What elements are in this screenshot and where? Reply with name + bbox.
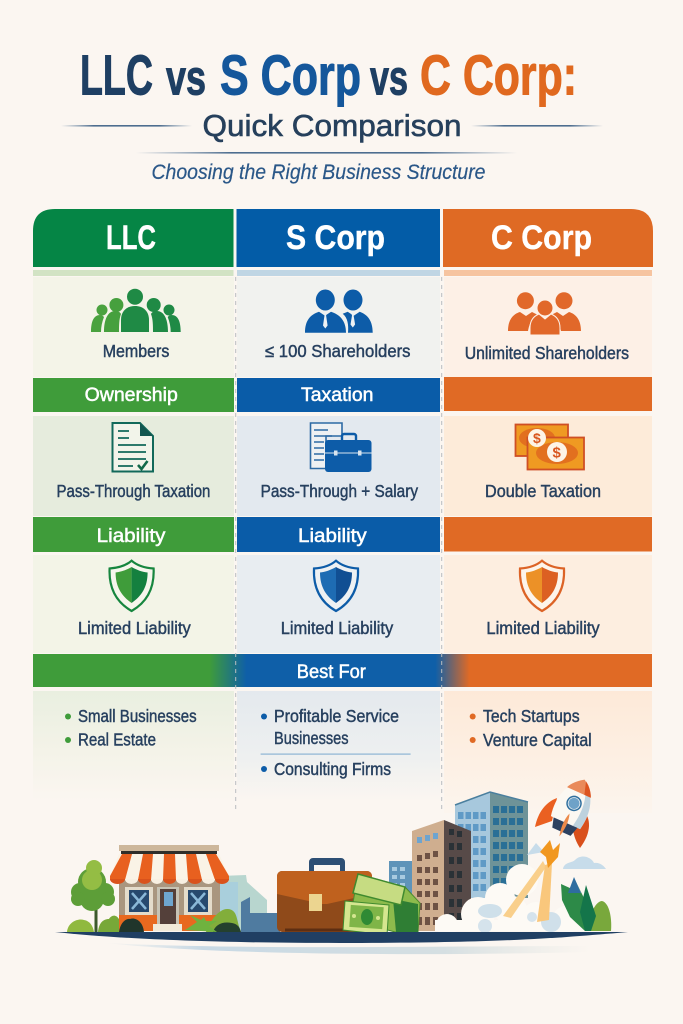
icon: cash stacks	[343, 874, 420, 935]
panel: C Corp header	[443, 209, 653, 276]
list: C Corp uses: Venture Capital	[483, 730, 592, 750]
label: Limited Liability LLC: Limited Liability	[78, 618, 191, 638]
ground shadow	[105, 943, 590, 954]
list: C Corp uses	[470, 706, 592, 750]
label: Pass-Through + Salary: Pass-Through + Salary	[261, 481, 418, 501]
band: Best For	[33, 654, 652, 687]
icon: green shield	[110, 561, 154, 611]
background buildings left	[220, 875, 280, 932]
panel: taxation row	[33, 416, 652, 516]
label: 100 shareholders: ≤ 100 Shareholders	[265, 341, 411, 361]
tagline: Choosing the Right Business Structure	[152, 161, 486, 184]
band: Ownership: Ownership	[85, 384, 178, 406]
band: Liability S Corp	[237, 517, 440, 552]
list: C Corp uses: Tech Startups	[483, 706, 580, 726]
illustration: business scene	[55, 773, 628, 954]
list: S Corp uses: Businesses	[274, 728, 349, 748]
panel: LLC header: LLC	[106, 219, 156, 257]
band: Liability LLC	[33, 517, 234, 552]
band: C Corp blank ownership bar	[444, 377, 652, 411]
panel: C Corp header: C Corp	[491, 219, 592, 257]
band: C Corp blank liability bar	[444, 517, 652, 552]
title: vs	[166, 52, 206, 106]
icon: storefront	[110, 845, 229, 932]
icon: tax document	[112, 423, 153, 472]
panel: S Corp header	[236, 209, 440, 276]
icon: briefcase	[277, 858, 372, 932]
list: LLC uses: Real Estate	[78, 730, 156, 750]
panel: LLC header	[33, 209, 234, 276]
icon: rocket	[503, 773, 600, 922]
label: Limited Liability C Corp: Limited Liability	[486, 618, 600, 638]
label: Limited Liability S Corp: Limited Liability	[281, 618, 393, 638]
icon: members group	[91, 289, 181, 332]
band: Liability S Corp: Liability	[298, 525, 367, 547]
icon: blue shield	[314, 561, 358, 611]
list: LLC uses: Small Businesses	[78, 706, 197, 726]
title: S Corp	[220, 44, 361, 108]
list: S Corp uses: Profitable Service	[274, 706, 399, 726]
title: LLC	[80, 44, 153, 108]
icon: double taxation money: $	[552, 444, 562, 462]
trees right	[561, 877, 611, 931]
label: Double Taxation: Double Taxation	[485, 481, 601, 501]
icon: double taxation money	[516, 424, 584, 470]
list: S Corp uses	[261, 706, 411, 779]
band: Taxation: Taxation	[301, 384, 374, 406]
icon: double taxation money: $	[533, 430, 541, 446]
title: vs	[370, 52, 408, 106]
ground	[55, 932, 628, 943]
icon: tree	[67, 860, 123, 932]
panel: liability row	[33, 555, 652, 653]
list: S Corp uses: Consulting Firms	[274, 759, 391, 779]
panel: S Corp header: S Corp	[286, 219, 385, 257]
label: Members: Members	[103, 341, 170, 361]
bushes	[185, 909, 241, 932]
icon: orange shield	[520, 561, 564, 611]
panel: ownership row	[33, 277, 652, 377]
band: Best For: Best For	[297, 661, 366, 683]
smoke clouds	[435, 843, 606, 936]
band: Liability LLC: Liability	[97, 525, 166, 547]
icon: brown office building	[412, 820, 471, 931]
band: Ownership	[33, 378, 234, 412]
label: Pass-Through Taxation: Pass-Through Taxation	[56, 481, 210, 501]
icon: document and briefcase	[310, 423, 372, 472]
panel: best for C Corp	[444, 691, 652, 813]
icon: two shareholders	[305, 290, 373, 333]
title: C Corp:	[420, 44, 577, 108]
icon: unlimited shareholders	[508, 292, 581, 335]
panel: best for LLC	[33, 691, 234, 813]
label: Unlimited Shareholders: Unlimited Shareholders	[465, 343, 629, 363]
panel: best for S Corp	[237, 691, 440, 813]
title	[80, 44, 577, 108]
list: LLC uses	[65, 706, 197, 750]
subtitle: Quick Comparison: Quick Comparison	[202, 108, 462, 143]
background small building	[389, 861, 412, 931]
band: Taxation	[237, 378, 440, 412]
icon: tall glass building	[455, 792, 528, 898]
